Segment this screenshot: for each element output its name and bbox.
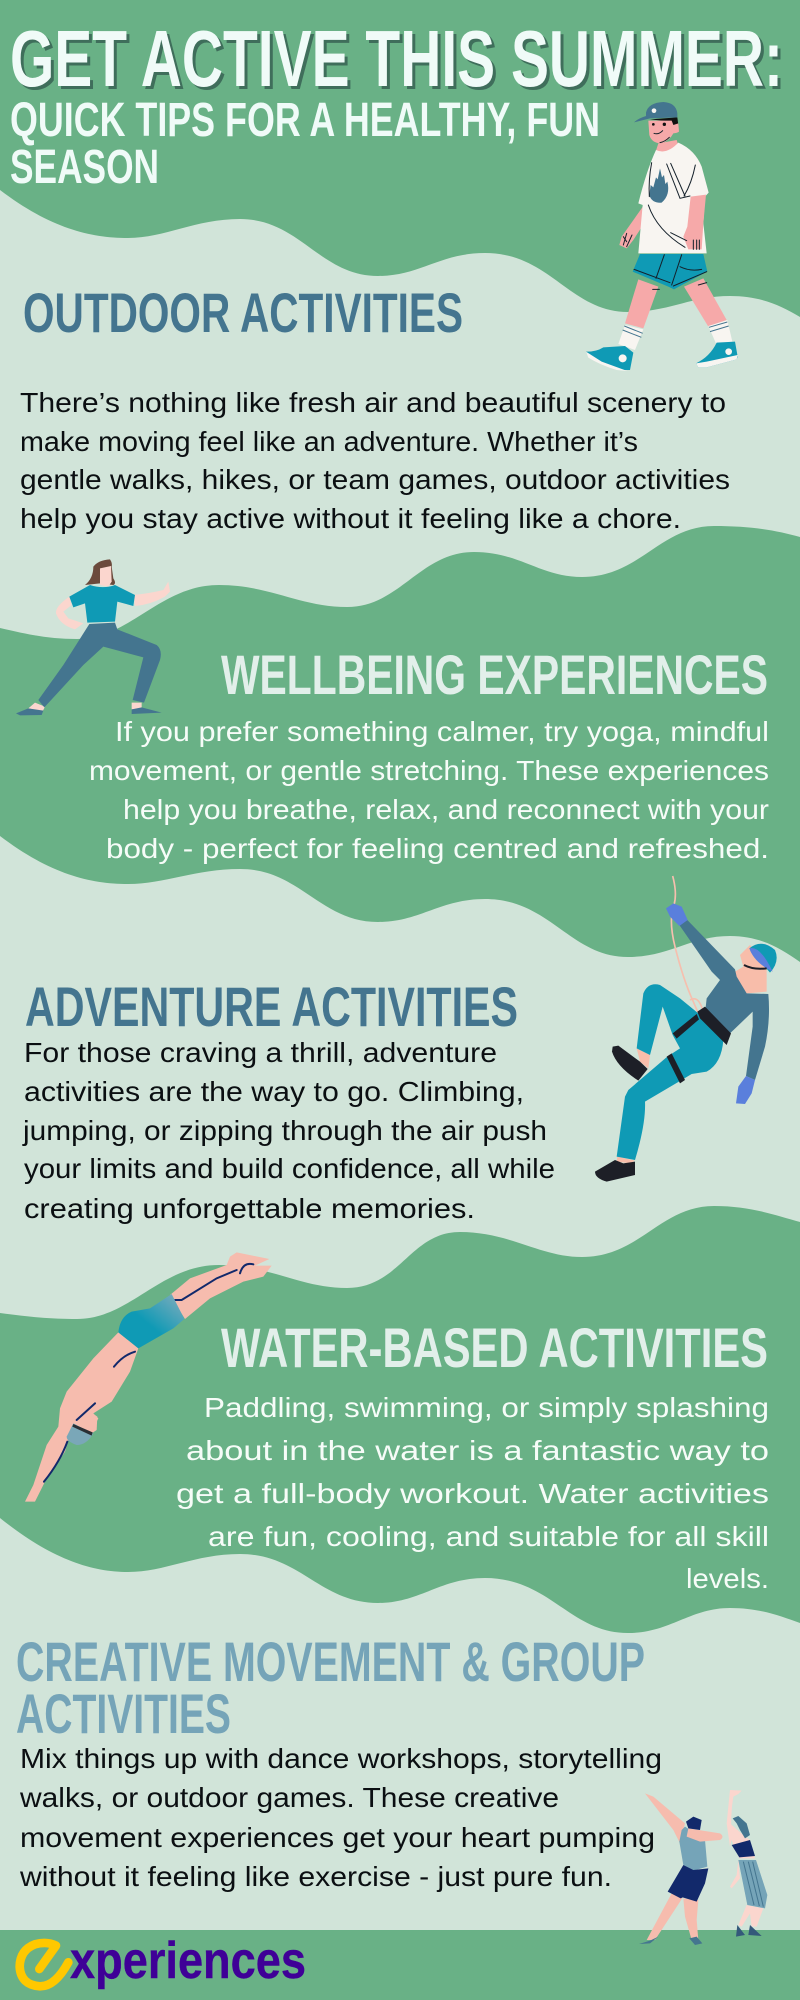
text: water body: Paddling, swimming, or simply splashing [204,1392,769,1423]
subtitle: QUICK TIPS FOR A HEALTHY, FUN [10,94,600,147]
text: wellbeing body: body - perfect for feeling centred and refreshed. [106,833,769,864]
text: outdoor activities body: There’s nothing like fresh air and beautiful scenery to [20,387,726,418]
panel: water wave [0,1206,800,1633]
text: water body [176,1392,769,1594]
icon: woman stretching [16,559,170,715]
text: wellbeing body: help you breathe, relax, and reconnect with your [123,794,769,825]
icon: diver [25,1252,272,1502]
text: outdoor activities body: make moving feel like an adventure. Whether it’s [20,426,638,457]
panel: wellbeing experiences [89,643,769,864]
icon: walking man [586,102,738,371]
text: wellbeing body: If you prefer something calmer, try yoga, mindful [115,716,769,747]
panel: water-based activities [176,1316,769,1594]
text: outdoor activities body: gentle walks, hikes, or team games, outdoor activities [20,464,730,495]
text: water body: about in the water is a fantastic way to [186,1435,769,1466]
text: wellbeing body: movement, or gentle stretching. These experiences [89,755,769,786]
icon: climber [595,876,777,1182]
logo: experiences [20,1932,306,1990]
text: adventure body: activities are the way to go. Climbing, [24,1076,524,1107]
text: water body: are fun, cooling, and suitable for all skill [208,1521,769,1552]
text: water body: get a full-body workout. Water activities [176,1478,769,1509]
panel: footer band [0,1930,800,2000]
icon: dancers [639,1790,767,1945]
text: creative body: Mix things up with dance workshops, storytelling [20,1743,662,1774]
panel: wellbeing wave [0,526,800,962]
panel: outdoor activities [20,281,730,534]
heading: adventure activities: ADVENTURE ACTIVITIES [25,975,518,1038]
text: water body: levels. [686,1563,769,1594]
heading: outdoor activities: OUTDOOR ACTIVITIES [23,281,463,344]
text: adventure body: creating unforgettable memories. [24,1193,475,1224]
text: adventure body [22,1037,555,1224]
panel: header wave [0,0,800,317]
text: creative body: walks, or outdoor games. These creative [19,1782,559,1813]
heading: creative movement and group activities [16,1630,645,1745]
subtitle: SEASON [10,141,159,194]
text: adventure body: jumping, or zipping through the air push [22,1115,547,1146]
text: outdoor activities body: help you stay active without it feeling like a chore. [20,503,681,534]
text: outdoor activities body [20,387,730,534]
panel: adventure activities [22,975,555,1224]
icon: logo e [20,1943,68,1986]
subtitle [10,94,600,194]
heading: creative movement and group activities: ACTIVITIES [16,1682,231,1745]
text: creative body: without it feeling like exercise - just pure fun. [19,1861,612,1892]
text: creative body: movement experiences get your heart pumping [20,1822,655,1853]
text: adventure body: your limits and build confidence, all while [24,1153,555,1184]
text: logo wordmark: xperiences [70,1932,306,1990]
panel: creative movement [16,1630,662,1892]
text: creative body [19,1743,662,1892]
text: adventure body: For those craving a thrill, adventure [24,1037,497,1068]
text: wellbeing body [89,716,769,864]
